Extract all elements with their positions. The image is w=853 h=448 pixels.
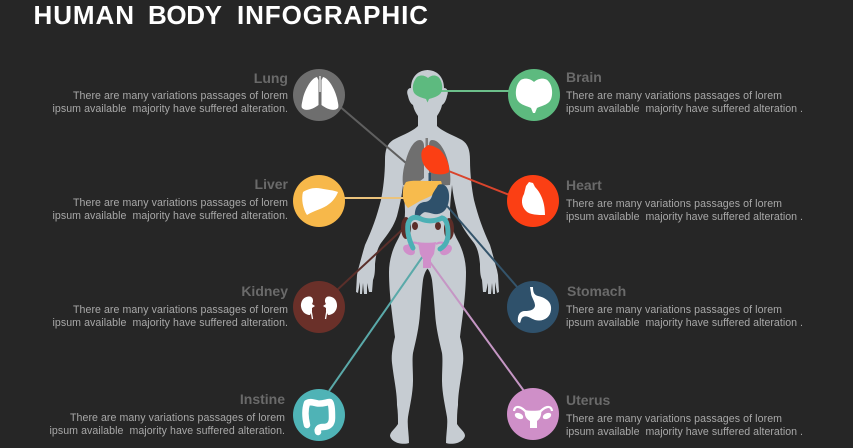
connector: liver (343, 197, 406, 199)
heading: heart: Heart (566, 177, 602, 193)
panel: heart (507, 175, 803, 227)
connector: kidney (336, 228, 404, 291)
text: heart: There are many variations passages of lorem (566, 198, 782, 210)
connector: heart (446, 170, 512, 196)
connector: intestine (329, 256, 423, 391)
panel: lung (52, 69, 345, 121)
text: brain: There are many variations passages of lorem (566, 90, 782, 102)
heading: intestine: Instine (240, 391, 285, 407)
heading: liver: Liver (255, 176, 289, 192)
text: kidney: There are many variations passages of lorem (73, 304, 288, 316)
text: intestine: ipsum available majority have suffered alteration. (50, 425, 285, 437)
icon: intestine (293, 389, 345, 441)
connector: brain (440, 90, 512, 92)
text: uterus: There are many variations passages of lorem (566, 413, 782, 425)
heading: stomach: Stomach (567, 283, 626, 299)
heading: lung: Lung (254, 70, 288, 86)
organ: liver (403, 181, 442, 208)
text: stomach: There are many variations passages of lorem (566, 304, 782, 316)
text: liver: There are many variations passages of lorem (73, 197, 288, 209)
organ: lungs (403, 138, 450, 185)
organ: heart (421, 145, 449, 174)
panel: liver (52, 175, 345, 227)
icon: stomach (507, 281, 559, 333)
title: BODY (148, 0, 222, 30)
organ: uterus (401, 242, 454, 268)
title: HUMAN (34, 0, 134, 30)
organ: stomach (415, 184, 449, 220)
human body silhouette (356, 70, 499, 444)
icon: kidney (293, 281, 345, 333)
icon: uterus (507, 388, 559, 440)
icon: brain (508, 69, 560, 121)
heading: brain: Brain (566, 69, 602, 85)
text: kidney: ipsum available majority have suffered alteration. (52, 317, 288, 329)
organ: trachea stub (428, 173, 431, 182)
organ: intestine (408, 217, 448, 249)
text: intestine: There are many variations passages of lorem (70, 412, 285, 424)
organ: kidneys (401, 217, 454, 240)
panel: uterus (507, 388, 803, 440)
text: lung: ipsum available majority have suffered alteration. (52, 103, 288, 115)
text: stomach: ipsum available majority have suffered alteration . (566, 317, 803, 329)
text: lung: There are many variations passages of lorem (73, 90, 288, 102)
connector: lung (338, 105, 406, 163)
organ: brain (413, 76, 442, 102)
panel: kidney (52, 281, 345, 333)
icon: lung (293, 69, 345, 121)
panel: brain (508, 69, 803, 121)
text: heart: ipsum available majority have suffered alteration . (566, 211, 803, 223)
panel: intestine (50, 389, 345, 441)
panel: stomach (507, 281, 803, 333)
text: uterus: ipsum available majority have suffered alteration . (566, 426, 803, 438)
heading: kidney: Kidney (241, 283, 288, 299)
text: liver: ipsum available majority have suffered alteration. (52, 210, 288, 222)
connector: uterus (430, 262, 524, 391)
organs on body (401, 76, 454, 268)
heading: uterus: Uterus (566, 392, 611, 408)
title: INFOGRAPHIC (237, 0, 428, 30)
text: brain: ipsum available majority have suffered alteration . (566, 103, 803, 115)
icon: heart (507, 175, 559, 227)
icon: liver (293, 175, 345, 227)
connector: stomach (447, 206, 518, 288)
